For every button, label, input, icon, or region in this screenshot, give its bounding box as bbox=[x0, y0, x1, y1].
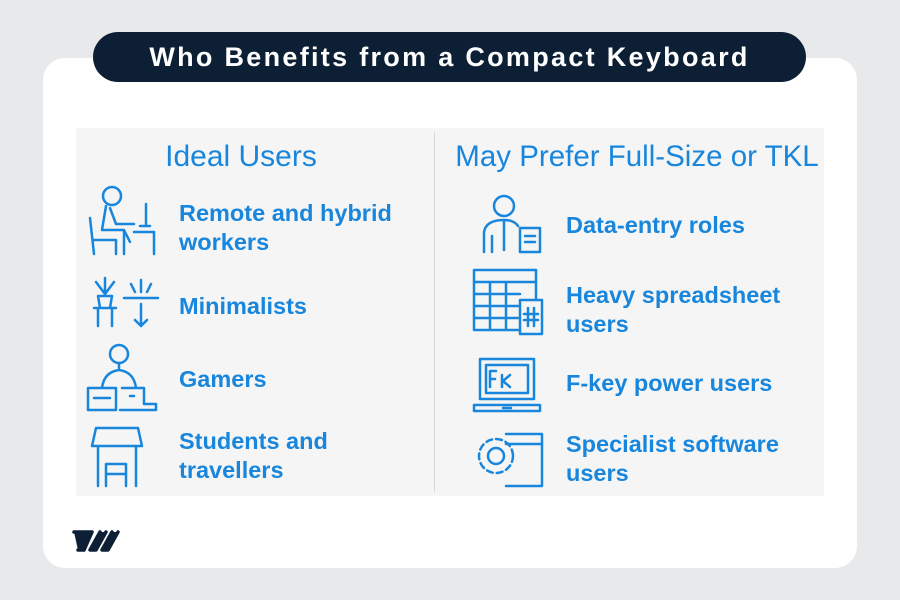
card bbox=[43, 58, 857, 568]
icon: data entry bbox=[482, 194, 542, 254]
icon: spreadsheet bbox=[472, 268, 544, 336]
panel bbox=[76, 128, 824, 496]
text: remote: workers bbox=[179, 229, 269, 255]
text: gamers: Gamers bbox=[179, 366, 267, 392]
text: students: Students and bbox=[179, 428, 328, 454]
text: fkey: F-key power users bbox=[566, 370, 772, 396]
text: spreadsheet bbox=[566, 282, 780, 337]
icon: laptop F-key bbox=[472, 358, 542, 412]
heading: prefer full-size: May Prefer Full-Size or TKL bbox=[455, 140, 819, 173]
text: spreadsheet: users bbox=[566, 311, 629, 337]
title bbox=[93, 32, 806, 82]
text: students: travellers bbox=[179, 457, 284, 483]
text: data entry: Data-entry roles bbox=[566, 212, 745, 238]
icon: minimalist bbox=[92, 276, 160, 328]
icon: gear window bbox=[478, 432, 544, 488]
text: minimalists: Minimalists bbox=[179, 293, 307, 319]
icon: remote worker bbox=[88, 186, 156, 256]
text: students bbox=[179, 428, 328, 483]
text: specialist bbox=[566, 431, 779, 486]
heading: ideal users: Ideal Users bbox=[165, 140, 317, 173]
text: specialist: users bbox=[566, 460, 629, 486]
text: remote: Remote and hybrid bbox=[179, 200, 392, 226]
title: Who Benefits from a Compact Keyboard bbox=[149, 42, 750, 72]
logo bbox=[72, 530, 120, 552]
icon: desk bbox=[90, 426, 144, 488]
text: remote bbox=[179, 200, 392, 255]
text: spreadsheet: Heavy spreadsheet bbox=[566, 282, 780, 308]
icon: gamer bbox=[86, 344, 158, 412]
text: specialist: Specialist software bbox=[566, 431, 779, 457]
